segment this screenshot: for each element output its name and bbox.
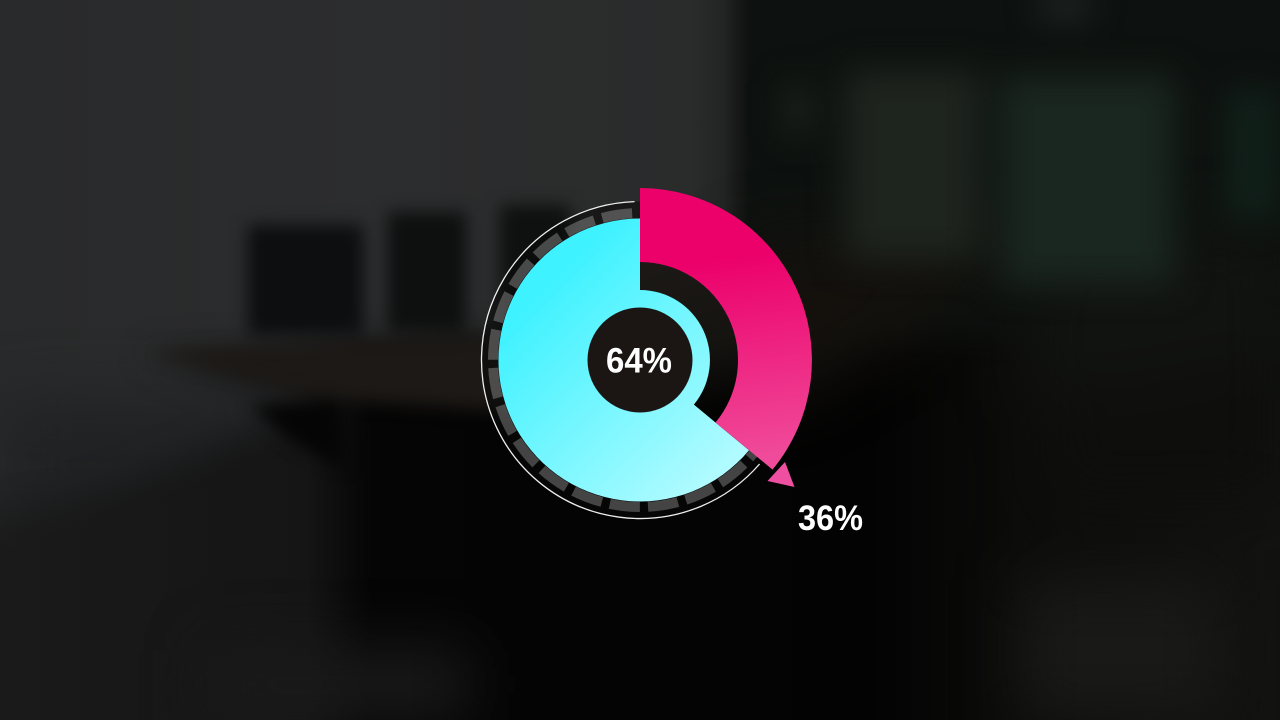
track: dark band behind the dashes [490, 210, 790, 510]
label: 36%: 36% [798, 499, 863, 538]
segment: 64% cyan [498, 218, 749, 502]
track: dashed ring [493, 213, 787, 507]
icon: pink pointer triangle [768, 462, 794, 487]
outer white arc [481, 202, 760, 519]
segment: 36% pink [640, 188, 812, 470]
segment: inner dark wedge [640, 262, 738, 422]
center hub [588, 308, 692, 412]
label: 64%: 64% [606, 342, 672, 380]
donut chart [481, 188, 812, 519]
